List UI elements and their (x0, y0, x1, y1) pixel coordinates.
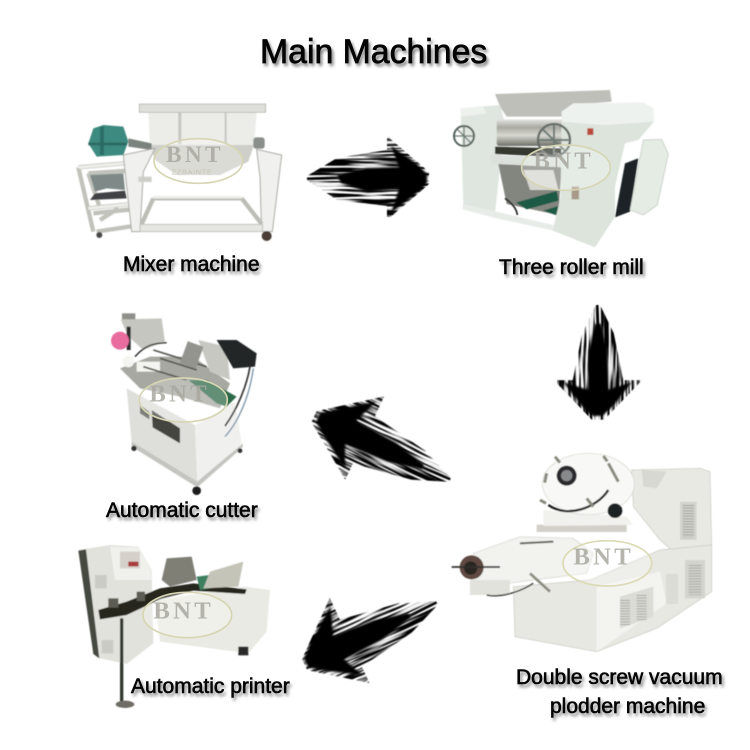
label: double screw vacuum plodder machine: Double screw vacuum (516, 666, 723, 689)
watermark (563, 541, 652, 586)
label: three roller mill: Three roller mill (499, 256, 644, 279)
watermark: BNT (153, 597, 214, 624)
arrow: three roller mill to plodder (554, 305, 642, 420)
watermark: BNT (573, 544, 634, 571)
icon: automatic cutter (111, 313, 257, 495)
label: mixer machine: Mixer machine (123, 253, 260, 276)
arrow: plodder to automatic cutter (295, 373, 470, 520)
icon: three roller mill (454, 90, 668, 247)
label: double screw vacuum plodder machine (516, 666, 726, 722)
watermark: BNT (149, 381, 210, 408)
arrow: mixer to three roller mill (307, 136, 429, 220)
title: Main Machines (260, 33, 487, 71)
watermark (139, 378, 227, 422)
label: double screw vacuum plodder machine: plodder machine (550, 695, 705, 718)
watermark (143, 592, 232, 638)
watermark: BNT (533, 148, 594, 175)
label: automatic printer: Automatic printer (131, 675, 290, 698)
label: automatic cutter: Automatic cutter (106, 499, 258, 522)
watermark: ZZBAINTE (172, 167, 212, 176)
icon: double screw vacuum plodder machine (452, 453, 712, 652)
watermark (154, 139, 243, 183)
icon: automatic printer (78, 545, 270, 708)
watermark: BNT (166, 142, 224, 168)
watermark (522, 145, 610, 190)
arrow: plodder to automatic printer (284, 558, 456, 705)
icon: mixer machine (78, 104, 282, 241)
